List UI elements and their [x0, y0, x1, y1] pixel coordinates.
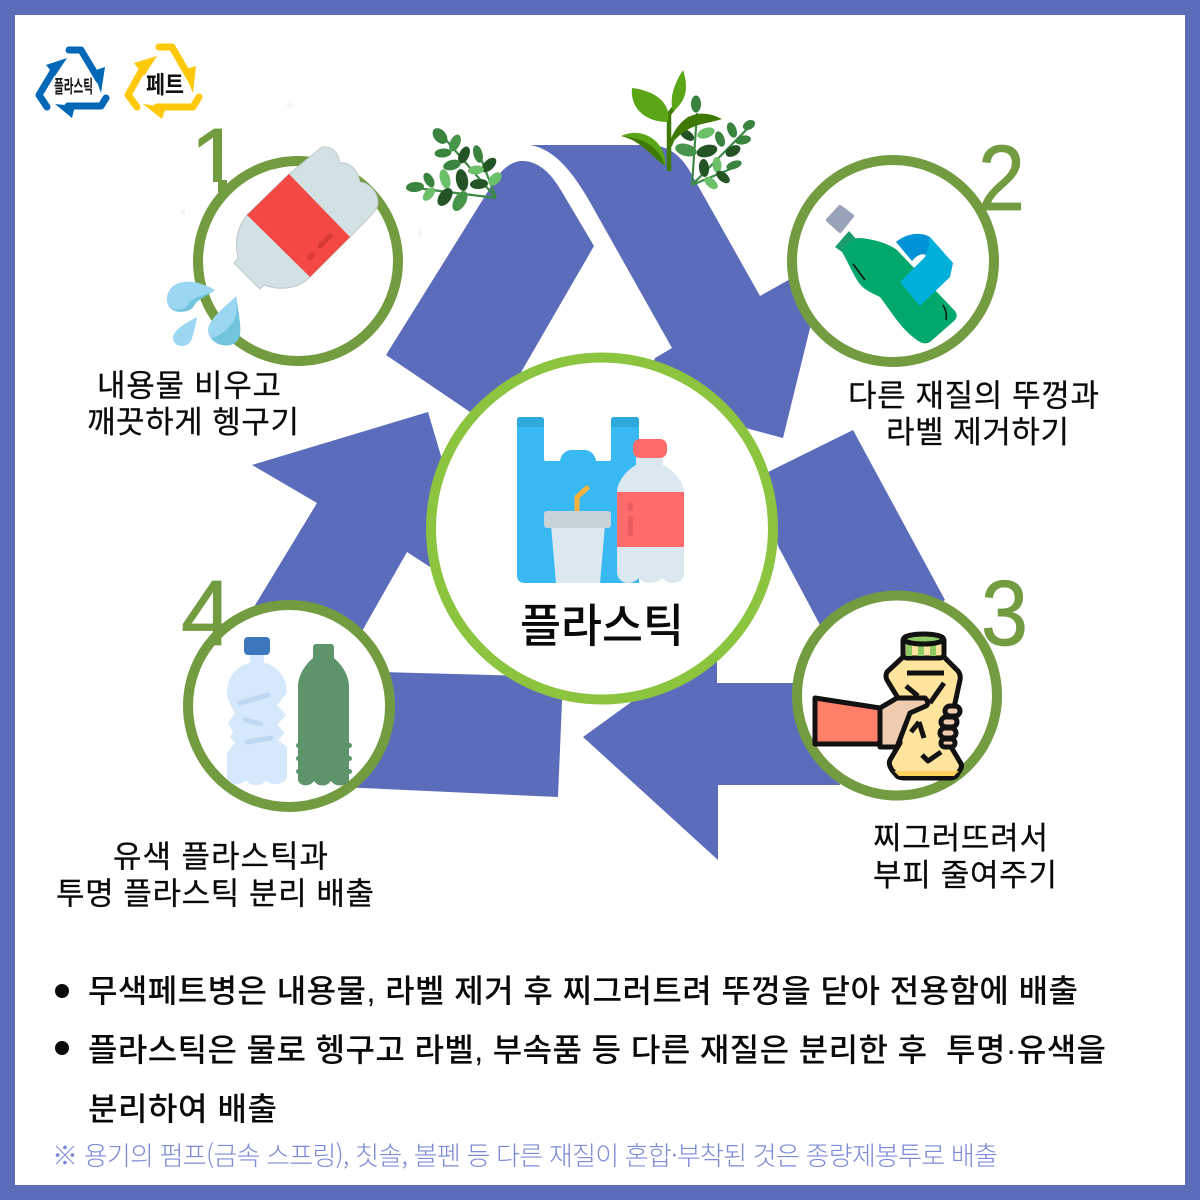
label: step 1 [87, 368, 299, 440]
label: step 2 [848, 378, 1099, 450]
icon: water drops [167, 282, 240, 346]
icon: plastic items (bag, cup, bottle) [517, 417, 684, 583]
label: step 4: 유색 플라스틱과 [113, 840, 328, 874]
bullet item 2 [55, 1032, 1106, 1127]
label: step 1: 내용물 비우고 [97, 368, 281, 404]
bullet item 2: 분리하여 배출 [88, 1091, 277, 1127]
arrow: right [768, 430, 945, 640]
arrow: left [240, 412, 460, 670]
label: step 4 [56, 840, 374, 912]
footnote: ※ 용기의 펌프(금속 스프링), 칫솔, 볼펜 등 다른 재질이 혼합·부착된 것은 종량제봉투로 배출 [52, 1136, 998, 1173]
label: step 2: 다른 재질의 뚜껑과 [848, 378, 1099, 414]
arrow: bottom right [583, 640, 840, 860]
step number 4: 4 [181, 561, 233, 665]
circle: step 1 [198, 161, 398, 361]
circle: step 4 [188, 605, 390, 807]
icon: clear bottle [227, 637, 287, 785]
label: step 2: 라벨 제거하기 [886, 415, 1069, 450]
step number 1 [198, 128, 227, 192]
icon: green bottle with label [828, 207, 957, 343]
step number 1: 1 [190, 109, 242, 213]
icon: bottle pouring [234, 147, 378, 289]
plant: tall leaves [621, 70, 722, 171]
icon: hand crushing bottle [815, 634, 962, 778]
arrow: top [530, 145, 812, 438]
logo: plastic recycling mark [39, 50, 106, 118]
logo: PET recycling mark: 페트 [146, 72, 184, 99]
arrow: bottom left [340, 672, 563, 797]
circle: center [431, 358, 773, 700]
plant: right sprig [674, 96, 757, 192]
step number 2: 2 [978, 126, 1025, 230]
circle: step 3 [797, 596, 997, 796]
label: step 3: 찌그러뜨려서 [873, 821, 1048, 856]
label: step 3: 부피 줄여주기 [873, 858, 1057, 893]
label: step 1: 깨끗하게 헹구기 [87, 405, 299, 440]
logo: PET recycling mark [128, 47, 199, 119]
circle: step 2 [792, 160, 994, 362]
label: step 3 [873, 821, 1057, 893]
bullet item 1: 무색페트병은 내용물, 라벨 제거 후 찌그러트려 뚜껑을 닫아 전용함에 배출 [88, 973, 1078, 1009]
plant: left sprig [406, 125, 504, 214]
bullet item 2: 플라스틱은 물로 헹구고 라벨, 부속품 등 다른 재질은 분리한 후 투명·유색을 [88, 1032, 1106, 1068]
arrow: upper left band [386, 161, 594, 412]
label: step 4: 투명 플라스틱 분리 배출 [56, 876, 374, 912]
step number 3: 3 [981, 561, 1028, 665]
center title: 플라스틱 [520, 600, 684, 652]
recycling arrows [240, 145, 945, 860]
faint marks around step 1 [180, 102, 423, 345]
icon: green tinted bottle [296, 644, 352, 786]
logo: plastic recycling mark: 플라스틱 [54, 77, 93, 97]
